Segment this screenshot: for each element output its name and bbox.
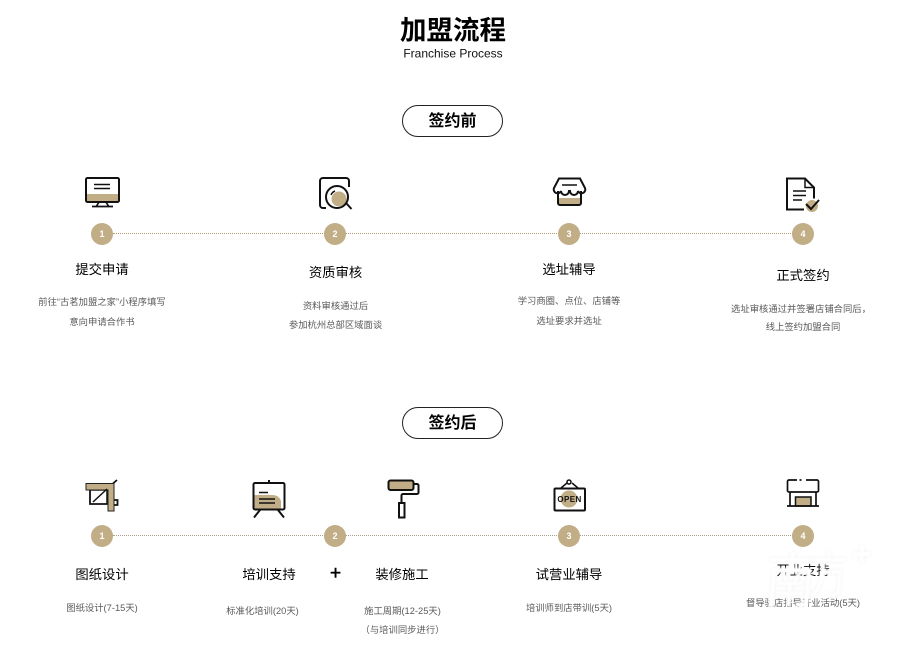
step 3 description: 培训师到店带训(5天) (526, 603, 612, 613)
step 4 title: 正式签约 (776, 268, 830, 283)
decoration description: 施工周期(12-25天) (364, 606, 441, 616)
step 1 description line 2: 意向申请合作书 (69, 317, 135, 327)
step 4 description: 选址审核通过并签署店铺合同后， (731, 304, 871, 314)
watermark: 南 (762, 534, 820, 620)
step 3 number (558, 222, 580, 244)
subtitle: Franchise Process (403, 46, 503, 60)
step 4 number (792, 524, 814, 546)
heading: before signing: 签约前 (428, 113, 476, 130)
step 2 description: 资料审核通过后 (303, 301, 368, 311)
training description: 标准化培训(20天) (226, 606, 299, 616)
step 4 number: 4 (800, 228, 806, 238)
timeline: after signing (113, 535, 803, 536)
step 4 title: 开业支持 (776, 563, 830, 578)
step 2 title: 资质审核 (309, 265, 362, 280)
step 3 title: 选址辅导 (542, 262, 596, 277)
step 3 number: 3 (566, 530, 572, 540)
watermark: 方 (808, 533, 848, 609)
training title: 培训支持 (242, 567, 296, 582)
step 2 number: 2 (332, 228, 338, 238)
watermark (762, 530, 872, 620)
step 3 number (558, 524, 580, 546)
step 1 title: 图纸设计 (75, 567, 129, 582)
step 3 description: 学习商圈、点位、店铺等 (518, 296, 620, 306)
step 1 description: 图纸设计(7-15天) (66, 603, 138, 613)
icon: open sign: OPEN (557, 495, 582, 504)
watermark: + (852, 530, 872, 576)
step 4 number: 4 (800, 530, 806, 540)
step 4 number (792, 222, 814, 244)
step 1 number (91, 524, 113, 546)
step 1 title: 提交申请 (75, 262, 129, 277)
decoration title: 装修施工 (375, 567, 429, 582)
step 1 number: 1 (99, 530, 104, 540)
step 4 description: 督导驻店指导开业活动(5天) (746, 598, 860, 608)
plus sign: + (330, 563, 341, 584)
step 1 number (91, 222, 113, 244)
heading: before signing (402, 105, 503, 137)
heading: after signing: 签约后 (428, 415, 476, 432)
decoration description line 2: （与培训同步进行） (361, 625, 444, 635)
step 4 description line 2: 线上签约加盟合同 (766, 322, 840, 332)
step 1 number: 1 (99, 228, 104, 238)
step 2 number (324, 222, 346, 244)
step 3 title: 试营业辅导 (536, 567, 602, 582)
step 2 description line 2: 参加杭州总部区域面谈 (289, 320, 382, 330)
step 3 description line 2: 选址要求并选址 (536, 316, 602, 326)
step 2 number: 2 (332, 530, 338, 540)
step 3 number: 3 (566, 228, 572, 238)
step 1 description: 前往“古茗加盟之家”小程序填写 (38, 297, 166, 307)
timeline: before signing (113, 233, 803, 234)
step 2 number (324, 524, 346, 546)
heading: after signing (402, 407, 503, 439)
title: 加盟流程 (400, 15, 506, 45)
